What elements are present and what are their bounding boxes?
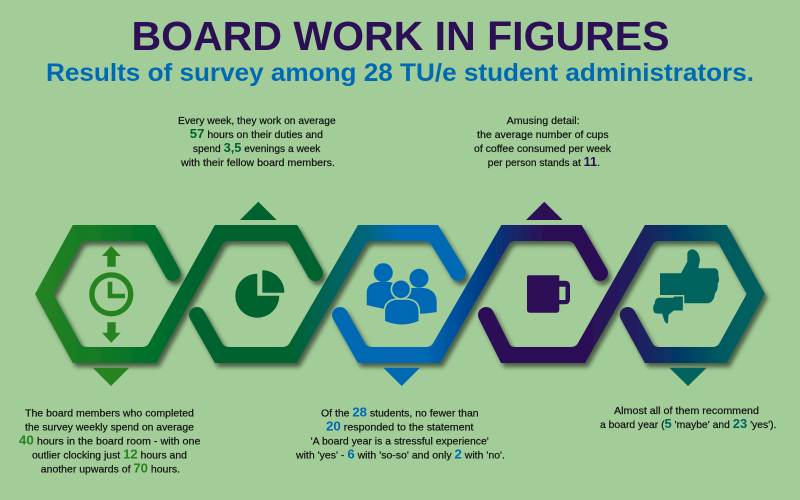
hexagon chain bbox=[44, 233, 756, 355]
text block: hours in the board room: outlier clocking just 12 hours and bbox=[32, 447, 187, 462]
text block: recommendation: Almost all of them recommend bbox=[614, 406, 759, 417]
icon: coffee mug bbox=[527, 275, 570, 313]
text block: weekly hours and evenings: Every week, they work on average bbox=[178, 116, 336, 127]
hexagon strip: blue to purple bbox=[340, 233, 600, 355]
subtitle: Results of survey among 28 TU/e student administrators. bbox=[46, 59, 754, 87]
hexagon strip: purple to teal bbox=[486, 233, 756, 355]
text block: weekly hours and evenings: 57 hours on their duties and bbox=[190, 126, 323, 141]
icon: clock with up and down arrows bbox=[92, 246, 131, 343]
text block: hours in the board room: another upwards of 70 hours. bbox=[41, 461, 180, 476]
text block: weekly hours and evenings bbox=[178, 116, 336, 169]
hexagon strip: dark green to blue bbox=[197, 233, 458, 355]
text block: coffee detail: Amusing detail: bbox=[507, 116, 580, 127]
text block: stress statement: 'A board year is a stressful experience' bbox=[311, 437, 489, 448]
pointer triangle: hexagon 2 bbox=[240, 202, 277, 220]
text block: coffee detail: per person stands at 11. bbox=[488, 154, 600, 169]
text block: coffee detail: the average number of cups bbox=[477, 130, 609, 141]
text block: hours in the board room: the survey weekly spend on average bbox=[25, 423, 194, 434]
text block: stress statement: with 'yes' - 6 with 'so-so' and only 2 with 'no'. bbox=[295, 447, 505, 462]
text block: recommendation bbox=[600, 406, 776, 431]
text block: weekly hours and evenings: with their fellow board members. bbox=[180, 158, 335, 169]
text block: coffee detail: of coffee consumed per week bbox=[474, 144, 612, 155]
text block: coffee detail bbox=[474, 116, 612, 169]
pointer triangle: hexagon 1 bbox=[93, 368, 129, 386]
icon: group of people bbox=[367, 263, 437, 325]
icon: thumbs up and thumbs down bbox=[653, 249, 719, 324]
text block: stress statement: Of the 28 students, no fewer than bbox=[321, 405, 479, 420]
pointer triangle: hexagon 5 bbox=[669, 368, 707, 386]
text block: recommendation: a board year (5 'maybe' and 23 'yes'). bbox=[600, 416, 776, 431]
pointer triangle: hexagon 4 bbox=[526, 202, 563, 220]
pointer triangle: hexagon 3 bbox=[383, 368, 420, 386]
hexagon strip: green bbox=[44, 233, 315, 355]
text block: stress statement bbox=[295, 405, 505, 462]
text block: hours in the board room: The board members who completed bbox=[25, 409, 194, 420]
text block: hours in the board room: 40 hours in the board room - with one bbox=[19, 433, 201, 448]
title: BOARD WORK IN FIGURES bbox=[132, 13, 670, 59]
text block: hours in the board room bbox=[19, 409, 201, 476]
text block: weekly hours and evenings: spend 3,5 evenings a week bbox=[193, 140, 321, 155]
text block: stress statement: 20 responded to the statement bbox=[326, 419, 474, 434]
icon: pie chart bbox=[235, 270, 284, 318]
